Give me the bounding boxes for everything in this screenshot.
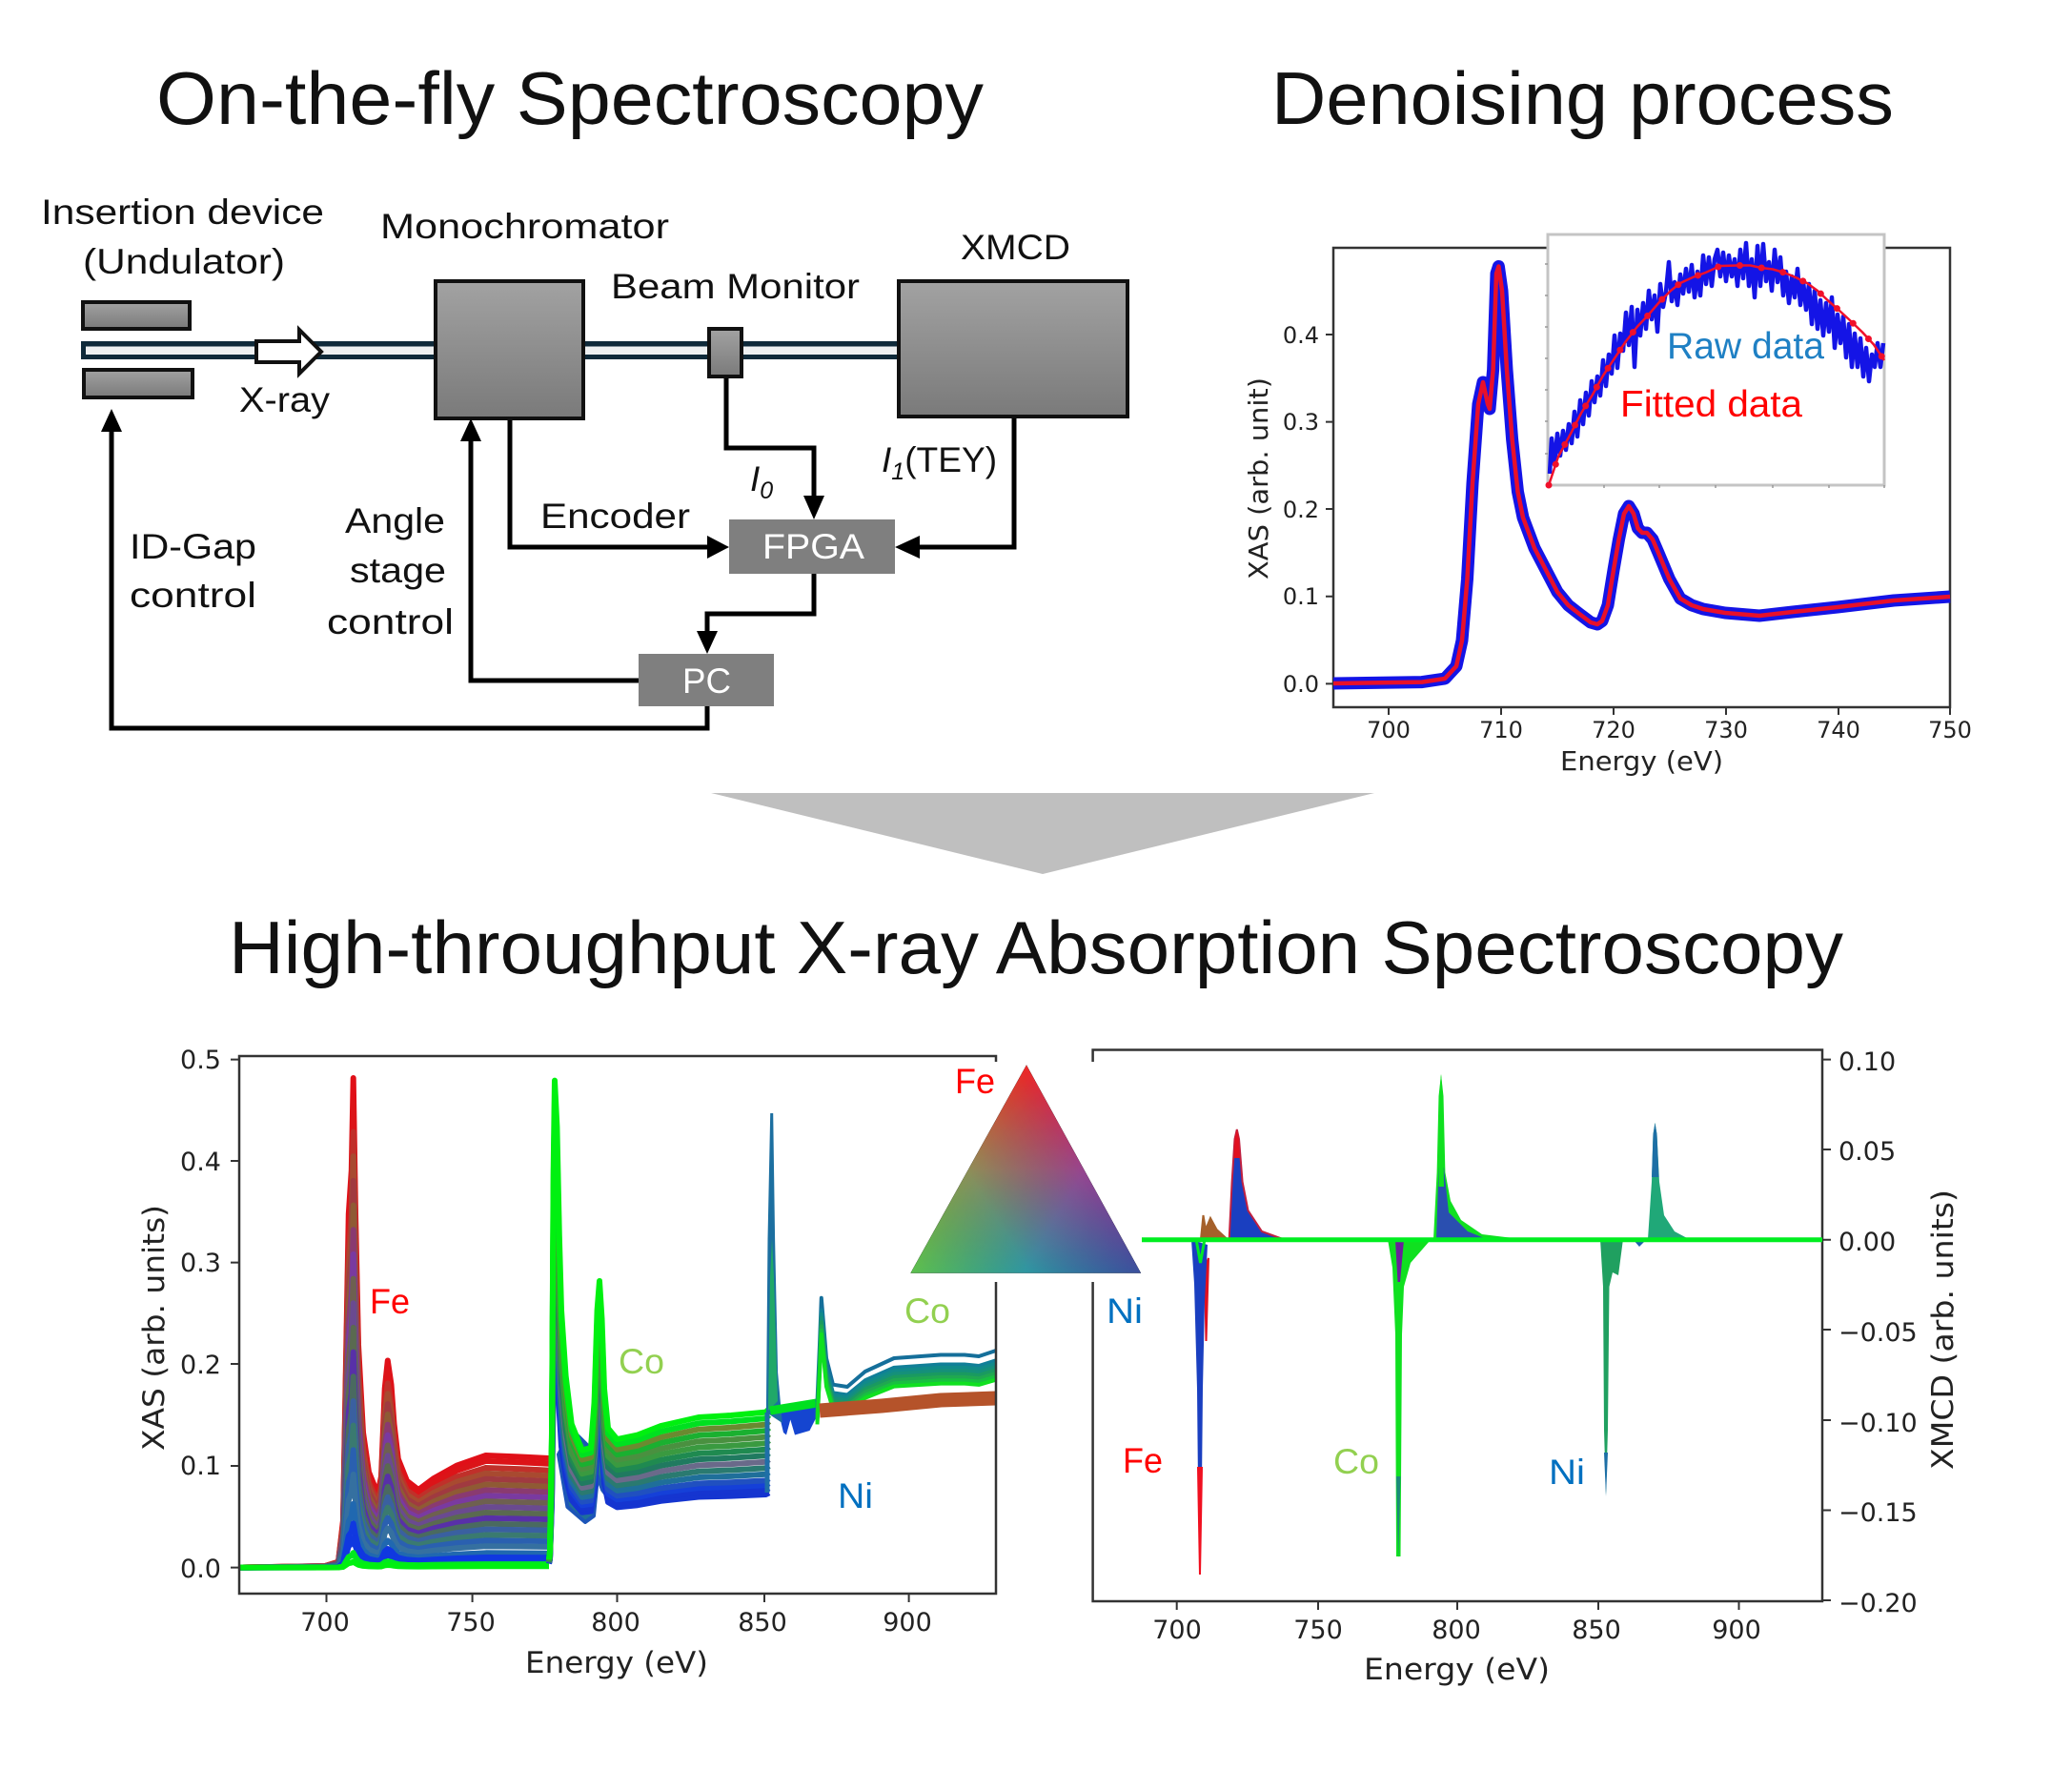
x-axis tick labels: 800 — [1432, 1616, 1481, 1645]
undulator lower magnet — [84, 370, 193, 397]
label: I1 (TEY): I — [882, 440, 891, 479]
x-axis tick labels: 740 — [1817, 717, 1860, 743]
x-axis tick labels — [300, 1608, 932, 1637]
XMCD spectra — [1142, 1074, 1822, 1575]
control arrow: PC to monochromator — [460, 418, 639, 681]
x-axis tick labels: 700 — [300, 1608, 350, 1637]
x-axis tick labels — [1367, 717, 1972, 743]
x-axis tick labels: 710 — [1479, 717, 1523, 743]
signal arrow: I0 to FPGA — [726, 378, 824, 519]
undulator upper magnet — [83, 302, 190, 329]
label: Angle stage control — [327, 501, 454, 641]
y-axis tick labels: 0.2 — [180, 1351, 221, 1380]
y-axis tick labels: 0.1 — [1283, 583, 1319, 610]
raw data curve — [1333, 267, 1950, 683]
Fe L2 peak — [1229, 1129, 1283, 1239]
element label: Co: Co — [1333, 1442, 1379, 1481]
monochromator box — [436, 281, 583, 418]
x-axis tick labels: 900 — [1712, 1616, 1761, 1645]
y-axis tick labels: 0.10 — [1838, 1047, 1896, 1077]
y-axis tick labels: 0.4 — [1283, 322, 1319, 349]
y-axis tick labels — [1838, 1047, 1918, 1618]
FPGA box: FPGA — [762, 527, 864, 566]
y-axis tick labels: 0.2 — [1283, 497, 1319, 523]
element label: Fe: Fe — [370, 1282, 410, 1321]
label: Undulator: (Undulator) — [83, 242, 285, 281]
axis ticks — [231, 1060, 909, 1602]
label: Angle stage control: Angle — [345, 501, 445, 540]
axis ticks — [1177, 1060, 1831, 1610]
y-axis tick labels: 0.5 — [180, 1046, 221, 1075]
y-axis tick labels: 0.0 — [1283, 671, 1319, 698]
Fe edge curve family — [239, 1078, 549, 1568]
Ni edge curve family — [767, 1113, 996, 1493]
label: Insertion device: Insertion device — [41, 193, 324, 232]
x-axis tick labels: 700 — [1367, 717, 1411, 743]
plot frame — [1333, 248, 1950, 707]
transition band — [770, 1403, 817, 1411]
Co edge curve family — [549, 1081, 769, 1564]
XMCD box — [899, 281, 1127, 417]
y-axis tick labels: 0.0 — [180, 1555, 221, 1584]
arrow: X-ray — [256, 330, 321, 374]
x-axis title: Energy (eV) — [1560, 745, 1723, 777]
y-axis title: XAS (arb. units) — [137, 1205, 172, 1451]
control arrow: PC to undulator gap — [101, 409, 707, 728]
FPGA box — [729, 519, 895, 574]
PC box: PC — [682, 661, 731, 701]
y-axis tick labels: −0.10 — [1838, 1409, 1918, 1438]
y-axis tick labels: 0.00 — [1838, 1228, 1896, 1257]
label: ID-Gap control: control — [130, 576, 256, 615]
x-axis tick labels — [1152, 1616, 1761, 1645]
inset fitted curve — [1549, 265, 1884, 485]
label: Angle stage control: control — [327, 602, 454, 641]
x-axis tick labels: 800 — [591, 1608, 640, 1637]
plot frame — [1093, 1050, 1822, 1601]
composition legend: Fe-Co-Ni triangle — [911, 1062, 1141, 1282]
y-axis tick labels — [180, 1046, 221, 1584]
y-axis tick labels — [1283, 322, 1319, 698]
y-axis tick labels: 0.1 — [180, 1452, 221, 1481]
Ni L3 peak — [767, 1113, 781, 1420]
y-axis tick labels: 0.4 — [180, 1148, 221, 1177]
fitted data curve — [1333, 267, 1950, 683]
element label: Ni: Ni — [1549, 1453, 1585, 1492]
legend backing mask — [994, 1062, 1095, 1282]
title: Denoising process: Denoising process — [1271, 56, 1894, 140]
Co pre-edge dip fill — [559, 1430, 620, 1522]
axis ticks — [1326, 335, 1950, 715]
x-axis tick labels: 750 — [1928, 717, 1972, 743]
label: I0: 0 — [760, 478, 773, 504]
arrow: large gray downward triangle — [711, 793, 1374, 874]
y-axis tick labels: 0.3 — [1283, 409, 1319, 436]
Co L3 dip — [1388, 1239, 1430, 1558]
element label: Ni near triangle: Ni — [1107, 1291, 1143, 1331]
signal arrow: encoder to FPGA — [510, 420, 729, 559]
Co L2 peak — [1433, 1074, 1521, 1239]
x-axis tick labels: 750 — [446, 1608, 496, 1637]
zero baseline — [1142, 1237, 1822, 1242]
x-axis tick labels: 850 — [738, 1608, 787, 1637]
Ni L3 dip — [1600, 1239, 1647, 1496]
x-axis title: Energy (eV) — [525, 1646, 708, 1680]
inset label: Fitted data: Fitted data — [1620, 384, 1802, 425]
x-axis tick labels: 900 — [883, 1608, 932, 1637]
signal arrow: FPGA to PC — [697, 574, 814, 654]
x-axis tick labels: 750 — [1293, 1616, 1343, 1645]
beam monitor box — [709, 329, 741, 376]
panel: XMCD composition chart — [1093, 1047, 1960, 1687]
Fe pre-edge bump — [1201, 1215, 1228, 1239]
inset raw data — [1550, 243, 1883, 474]
x-axis tick labels: 730 — [1704, 717, 1748, 743]
x-axis tick labels: 720 — [1592, 717, 1635, 743]
PC box — [639, 654, 774, 706]
Ni tail curves — [818, 1298, 996, 1424]
element label: Co near 800 eV: Co — [619, 1342, 664, 1381]
y-axis tick labels: −0.20 — [1838, 1589, 1918, 1618]
title: High-throughput X-ray Absorption Spectroscopy: High-throughput X-ray Absorption Spectroscopy — [229, 905, 1843, 989]
label: Encoder: Encoder — [540, 497, 690, 536]
x-axis title: Energy (eV) — [1364, 1653, 1550, 1687]
label: XMCD: XMCD — [961, 228, 1070, 267]
inset fitted sample points — [1549, 265, 1884, 485]
element label: Co upper right: Co — [904, 1291, 950, 1331]
label: ID-Gap control — [130, 527, 256, 615]
label: Beam Monitor: Beam Monitor — [611, 267, 860, 306]
x-axis tick labels: 850 — [1572, 1616, 1621, 1645]
panel: beamline diagram — [41, 193, 1127, 728]
panel: denoising chart — [1243, 234, 1972, 777]
label: I1 (TEY): (TEY) — [904, 440, 997, 479]
inset: zoomed peak — [1545, 234, 1884, 488]
Ni L3 lower green portion — [768, 1239, 778, 1411]
y-axis tick labels: −0.15 — [1838, 1498, 1918, 1528]
y-axis tick labels: 0.3 — [180, 1249, 221, 1278]
legend label: Fe: Fe — [955, 1062, 995, 1101]
Fe-rich tail band — [820, 1398, 996, 1411]
inset label: Raw data: Raw data — [1667, 326, 1824, 367]
Ni L2 peak — [1648, 1123, 1689, 1239]
y-axis title: XMCD (arb. units) — [1926, 1190, 1960, 1470]
label: Monochromator: Monochromator — [380, 207, 669, 246]
y-axis tick labels: 0.05 — [1838, 1137, 1896, 1167]
plot frame — [239, 1056, 996, 1594]
color triangle — [911, 1066, 1141, 1273]
Fe L3 dip — [1191, 1239, 1209, 1575]
element label: Ni: Ni — [838, 1476, 873, 1515]
panel: XAS composition chart — [137, 1046, 996, 1680]
x-axis tick labels: 700 — [1152, 1616, 1202, 1645]
title: On-the-fly Spectroscopy: On-the-fly Spectroscopy — [156, 56, 984, 140]
label: I0: I — [750, 459, 760, 498]
y-axis title: XAS (arb. unit) — [1243, 377, 1274, 580]
beam pipe — [81, 341, 897, 359]
label: ID-Gap control: ID-Gap — [130, 527, 256, 566]
signal arrow: I1 to FPGA — [895, 418, 1014, 559]
element label: Fe: Fe — [1123, 1441, 1163, 1480]
label: I1 (TEY): 1 — [891, 458, 904, 485]
y-axis tick labels: −0.05 — [1838, 1318, 1918, 1348]
label: X-ray: X-ray — [239, 380, 331, 419]
label: Angle stage control: stage — [350, 551, 446, 590]
Ni edge riser — [764, 1413, 770, 1493]
Ni dip region — [778, 1401, 818, 1435]
Fe tail under Co peak — [572, 1451, 594, 1454]
